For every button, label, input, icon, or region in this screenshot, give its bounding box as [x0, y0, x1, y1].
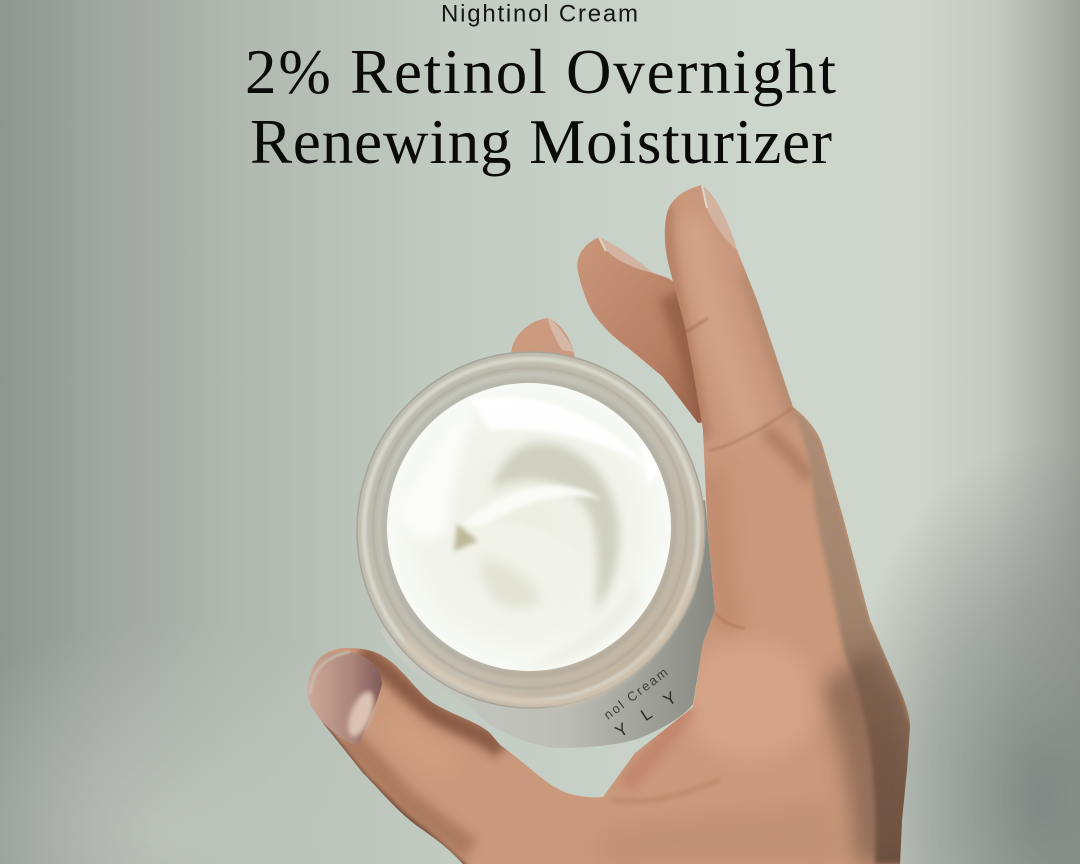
palm creases	[715, 612, 745, 628]
thumb shading	[360, 652, 502, 750]
middle finger	[577, 237, 702, 423]
jar label text: nol Cream	[601, 663, 672, 722]
jar glass rim	[357, 352, 705, 708]
right edge of hand in shadow	[793, 407, 912, 864]
palm highlight	[692, 643, 826, 755]
jar label text: YLY	[612, 678, 696, 741]
jar body	[380, 500, 715, 748]
thumb nail	[306, 652, 382, 746]
title: Renewing Moisturizer	[250, 107, 832, 177]
subtitle: Nightinol Cream	[441, 0, 638, 28]
index nail	[702, 185, 737, 250]
title: 2% Retinol Overnight	[245, 37, 836, 107]
title	[245, 37, 836, 177]
index finger shading	[668, 205, 705, 440]
cream surface	[387, 383, 671, 671]
hand holding the jar	[300, 180, 920, 864]
palm, index finger and thumb silhouette	[300, 180, 920, 864]
ring finger tip	[511, 317, 575, 358]
index knuckle creases	[686, 318, 708, 332]
